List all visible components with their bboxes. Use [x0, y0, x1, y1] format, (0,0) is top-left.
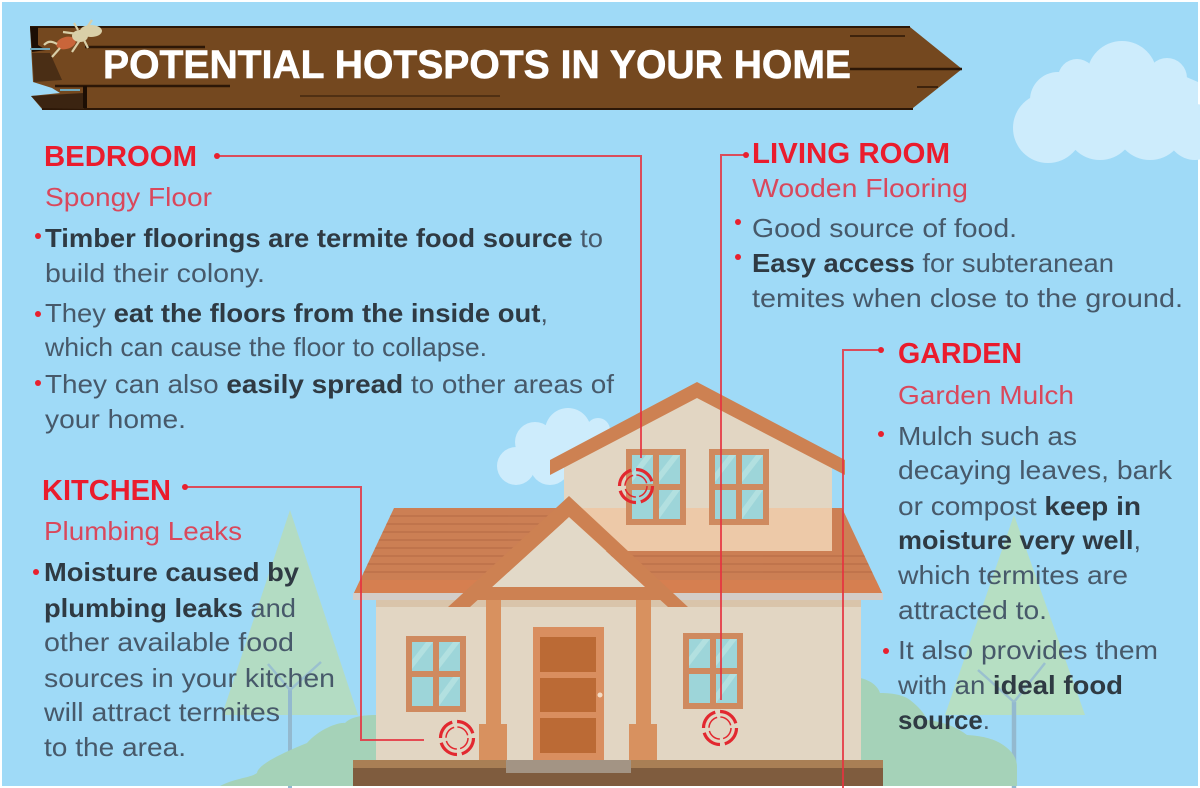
body text: source. — [898, 705, 990, 735]
connector: bedroom — [214, 153, 641, 458]
body text: sources in your kitchen — [44, 663, 335, 693]
bush: left — [220, 715, 378, 786]
body text: will attract termites — [43, 697, 280, 727]
body text: with an ideal food — [897, 670, 1123, 700]
heading: kitchen: KITCHEN — [42, 475, 171, 507]
tree: right — [945, 515, 1085, 788]
body text: Timber floorings are termite food source to — [45, 223, 603, 253]
body text — [43, 557, 335, 762]
body text: to the area. — [44, 732, 186, 762]
heading: bedroom: BEDROOM — [44, 141, 197, 173]
body text: which can cause the floor to collapse. — [44, 332, 487, 362]
body text: build their colony. — [45, 258, 265, 288]
body text: Easy access for subteranean — [752, 248, 1114, 278]
porch columns — [479, 600, 657, 760]
subheading: spongy floor: Spongy Floor — [45, 182, 212, 212]
panel: bedroom — [35, 141, 615, 434]
body text: which termites are — [897, 560, 1128, 590]
subheading: wooden flooring: Wooden Flooring — [752, 173, 968, 203]
body text: They eat the floors from the inside out , — [45, 298, 548, 328]
panel: garden — [878, 338, 1173, 735]
body text: Mulch such as — [898, 421, 1077, 451]
body text: your home. — [45, 404, 186, 434]
subheading: garden mulch: Garden Mulch — [898, 380, 1074, 410]
cloud: top right — [1013, 41, 1200, 163]
hotspot marker: living room — [704, 712, 736, 744]
gable porch — [448, 496, 688, 607]
connector: garden — [843, 347, 884, 788]
upper left window — [626, 449, 686, 525]
body text: Moisture caused by — [44, 557, 300, 587]
heading: garden: GARDEN — [898, 338, 1022, 370]
panel: kitchen — [33, 475, 335, 762]
upper right window — [709, 449, 769, 525]
upper roof — [550, 382, 845, 475]
wall shadow — [376, 600, 861, 607]
tree: left — [222, 510, 358, 788]
body text: moisture very well , — [898, 525, 1141, 555]
body text — [44, 223, 615, 434]
hotspot marker: kitchen — [440, 722, 474, 754]
bullet — [33, 569, 39, 575]
body text: decaying leaves, bark — [898, 455, 1173, 485]
body text: Good source of food. — [752, 213, 1017, 243]
lower left window — [406, 636, 466, 712]
body text — [897, 421, 1173, 735]
bullets — [735, 219, 741, 260]
body text: attracted to. — [898, 595, 1047, 625]
body text: or compost keep in — [898, 491, 1141, 521]
panel: living room — [735, 138, 1183, 313]
connector: kitchen — [182, 484, 424, 740]
hotspot marker: bedroom — [620, 470, 652, 502]
lower wall — [376, 600, 861, 760]
lower right window — [683, 633, 743, 709]
body text: plumbing leaks and — [44, 593, 296, 623]
icon: termite — [44, 20, 102, 57]
body text — [752, 213, 1183, 313]
cloud: behind house — [497, 408, 610, 485]
heading: living room: LIVING ROOM — [752, 138, 950, 170]
bush: right — [860, 678, 1017, 786]
bullets — [35, 233, 41, 386]
house — [353, 382, 883, 786]
body text: other available food — [44, 627, 294, 657]
subheading: plumbing leaks: Plumbing Leaks — [44, 516, 242, 546]
body text: temites when close to the ground. — [752, 283, 1183, 313]
ground — [353, 760, 883, 786]
bullets — [878, 431, 889, 654]
door — [533, 627, 604, 760]
upper storey wall — [564, 392, 832, 551]
eave strip — [353, 593, 883, 600]
main roof — [354, 508, 882, 593]
wooden sign banner — [30, 20, 962, 109]
body text: It also provides them — [898, 635, 1158, 665]
body text: They can also easily spread to other areas of — [45, 369, 615, 399]
banner title: POTENTIAL HOTSPOTS IN YOUR HOME — [103, 43, 851, 87]
connector: living room — [721, 152, 749, 700]
